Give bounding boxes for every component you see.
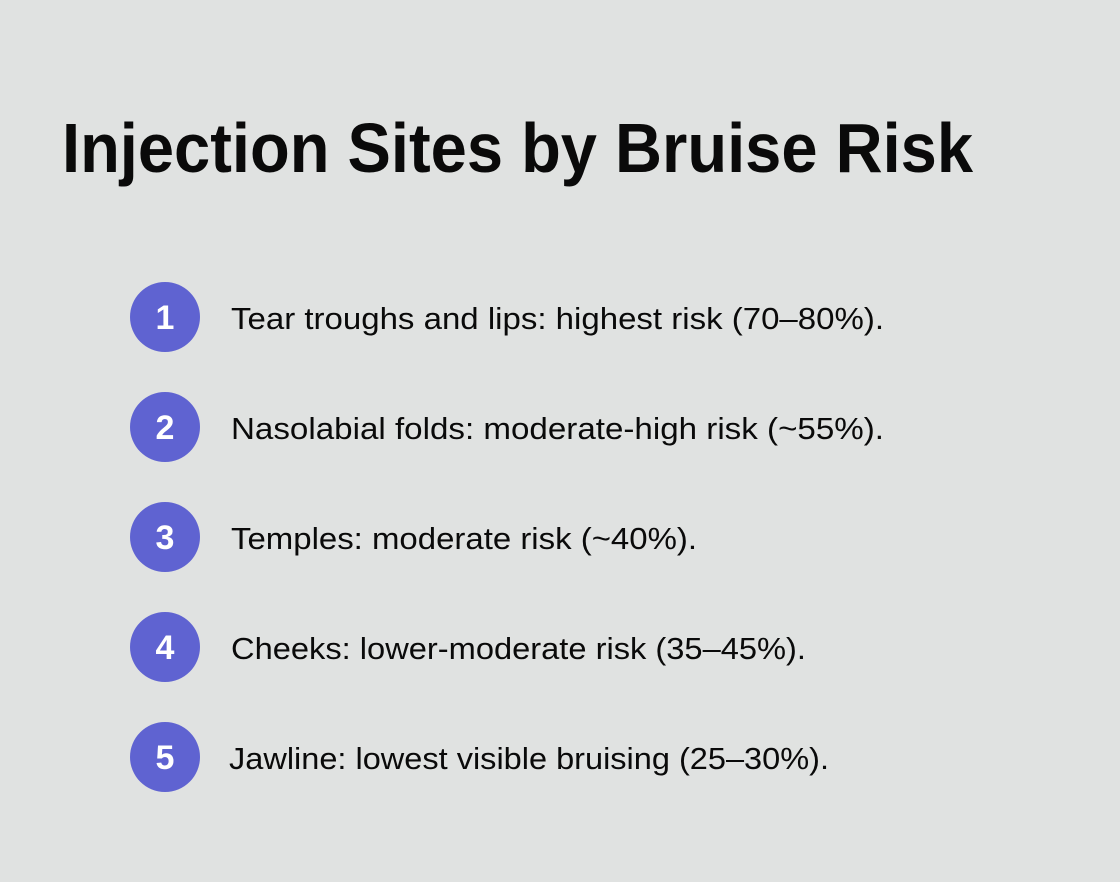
list item 1 bbox=[130, 282, 884, 352]
text: item 2: Nasolabial folds: moderate-high risk (~55%). bbox=[231, 411, 884, 446]
icon: number 1 circle: 1 bbox=[156, 299, 174, 337]
icon: number 2 circle bbox=[130, 392, 200, 462]
icon: number 5 circle bbox=[130, 722, 200, 792]
list item 4 bbox=[130, 612, 806, 682]
list item 3 bbox=[130, 502, 697, 572]
icon: number 5 circle: 5 bbox=[156, 739, 174, 777]
text: item 3: Temples: moderate risk (~40%). bbox=[231, 521, 697, 556]
text: item 1: Tear troughs and lips: highest risk (70–80%). bbox=[231, 301, 884, 336]
icon: number 2 circle: 2 bbox=[156, 409, 174, 447]
text: item 4: Cheeks: lower-moderate risk (35–45%). bbox=[231, 631, 806, 666]
list item 2 bbox=[130, 392, 884, 462]
list item 5 bbox=[130, 722, 829, 792]
icon: number 4 circle: 4 bbox=[156, 629, 175, 667]
text: item 5: Jawline: lowest visible bruising (25–30%). bbox=[229, 741, 829, 776]
icon: number 1 circle bbox=[130, 282, 200, 352]
icon: number 3 circle bbox=[130, 502, 200, 572]
icon: number 3 circle: 3 bbox=[156, 519, 174, 557]
title: Injection Sites by Bruise Risk bbox=[62, 109, 973, 187]
icon: number 4 circle bbox=[130, 612, 200, 682]
